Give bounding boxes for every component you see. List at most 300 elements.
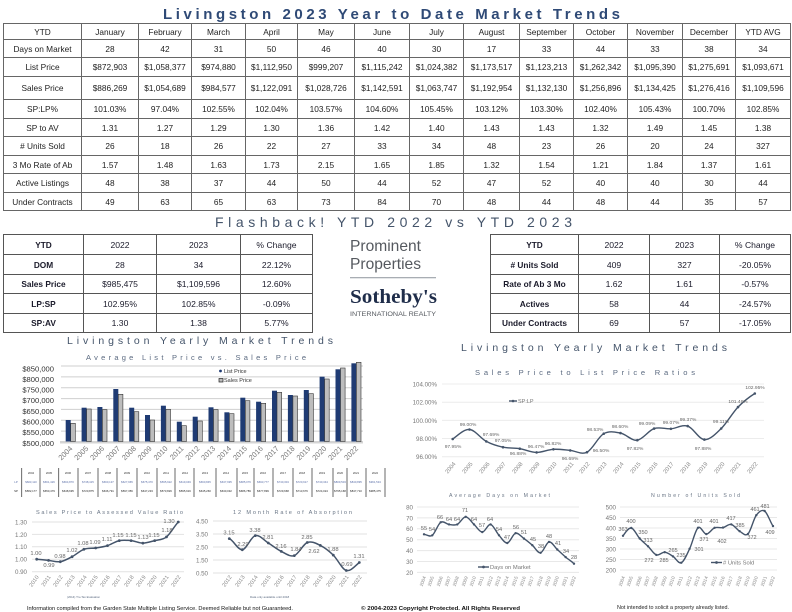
- row: list price: $1,024,382: [416, 62, 457, 72]
- x axis years: 2017: [112, 575, 124, 588]
- x axis years: 2021: [159, 575, 171, 588]
- y axis labels: $500,000: [22, 439, 54, 448]
- row: rate of absorption: [503, 279, 769, 289]
- y axis labels: [606, 504, 617, 574]
- y axis labels: [22, 364, 54, 448]
- table: yearly list and sales prices: 2008: [105, 471, 112, 475]
- trend line: [229, 535, 359, 571]
- row: days on market: 44: [596, 44, 605, 54]
- x axis years: 2019: [136, 575, 148, 588]
- y axis labels: 200: [606, 568, 617, 574]
- x axis years: 2010: [152, 444, 170, 462]
- row: under contracts: 57: [758, 196, 768, 206]
- row: rate of absorption: 1.48: [157, 160, 173, 170]
- x axis years: 2015: [261, 575, 273, 588]
- row: months header: November: [636, 26, 674, 36]
- row: list price: $999,207: [309, 62, 343, 72]
- row: DOM: 22.12%: [262, 260, 291, 270]
- row: rate of absorption: 1.32: [483, 160, 500, 170]
- row: active listings: 40: [650, 178, 660, 188]
- row: under contracts: 63: [160, 196, 170, 206]
- row: under contracts: 69: [609, 318, 619, 328]
- row: sale to list percent: 102.55%: [202, 104, 235, 114]
- table: yearly list and sales prices: $582,177: [25, 489, 37, 493]
- row: header: % Change: [735, 240, 775, 250]
- logo: Prominent Properties Sotheby's: [350, 238, 437, 318]
- data labels: 1.08: [77, 541, 89, 547]
- chart: number of units sold: [606, 493, 777, 587]
- x axis years: 2015: [231, 444, 249, 462]
- data labels: 417: [726, 516, 736, 522]
- table: yearly list and sales prices: $847,710: [350, 489, 362, 493]
- row: units sold: 26: [214, 141, 223, 151]
- x axis years: [419, 575, 577, 587]
- x axis years: 2021: [561, 575, 569, 587]
- x axis years: 2021: [730, 461, 743, 475]
- x axis years: 2020: [552, 575, 560, 587]
- x axis years: 2022: [171, 575, 183, 588]
- row: active listings: 44: [377, 178, 387, 188]
- row: LP:SP: -0.09%: [263, 298, 290, 308]
- row: active listings: 52: [542, 178, 551, 188]
- y axis labels: $750,000: [22, 386, 54, 394]
- y axis labels: 0.90: [15, 569, 28, 576]
- x axis years: 2017: [527, 575, 535, 587]
- caption: (2014) Tru-Tax Evaluation: [67, 595, 100, 599]
- table: yearly list and sales prices: 2014: [223, 471, 230, 475]
- x axis years: 2004: [419, 575, 427, 587]
- table: yearly list and sales prices: 2021: [353, 471, 360, 475]
- data labels: 481: [760, 504, 770, 510]
- x axis years: 2010: [29, 575, 41, 588]
- y axis labels: $800,000: [22, 375, 54, 384]
- row: months header: YTD AVG: [745, 26, 781, 36]
- y axis labels: 450: [606, 515, 617, 522]
- row: active listings: 37: [214, 178, 223, 188]
- table: yearly list and sales prices: 2009: [124, 471, 131, 475]
- x axis years: 2012: [53, 575, 65, 588]
- table: yearly list and sales prices: $648,695: [62, 489, 74, 493]
- x axis years: 2014: [613, 461, 626, 475]
- table: yearly list and sales prices: $677,899: [257, 489, 269, 493]
- y axis labels: [196, 518, 209, 578]
- data labels: 371: [699, 537, 709, 543]
- row: sales price: $1,063,747: [416, 83, 457, 93]
- row: rate of absorption: Rate of Ab 3 Mo: [503, 279, 566, 289]
- row: sale price to assessed value: 1.29: [210, 122, 227, 132]
- row: days on market: 30: [432, 44, 441, 54]
- row: sales price: $984,577: [201, 83, 236, 93]
- data labels: 1.02: [66, 548, 78, 554]
- table: yearly list and sales prices: $661,426: [43, 480, 55, 484]
- row: sales price: $1,134,425: [634, 83, 676, 93]
- row: under contracts: 44: [542, 196, 551, 206]
- chart: sales price to list price ratios: [413, 368, 765, 475]
- y axis labels: 70: [406, 516, 414, 522]
- row: days on market: 38: [704, 44, 714, 54]
- row: list price: $974,880: [201, 62, 236, 72]
- x axis years: 2017: [287, 575, 299, 588]
- data labels: 409: [765, 530, 775, 536]
- x axis years: 2013: [65, 575, 77, 588]
- x axis years: 2020: [751, 575, 759, 587]
- row: header: [502, 240, 775, 328]
- x axis years: 2016: [647, 461, 660, 475]
- row: months header: YTD: [34, 26, 51, 36]
- row: rate of absorption: 1.61: [676, 279, 693, 289]
- table: yearly list and sales prices: 2022: [372, 471, 379, 475]
- table: yearly list and sales prices: 2013: [202, 471, 209, 475]
- x axis years: 2007: [495, 461, 508, 475]
- data labels: 99.37%: [680, 417, 697, 423]
- x axis years: 2013: [596, 461, 609, 475]
- row: sale to list percent: 103.12%: [475, 104, 508, 114]
- x axis years: 2018: [124, 575, 136, 588]
- table: yearly list and sales prices: $573,826: [160, 489, 172, 493]
- x axis years: 2010: [469, 575, 477, 587]
- table: flashback left comparison: [3, 234, 313, 333]
- row: sales price: $1,132,130: [526, 83, 567, 93]
- table: yearly list and sales prices: $660,845: [199, 480, 211, 484]
- row: under contracts: 57: [680, 318, 689, 328]
- x axis years: 2020: [714, 461, 727, 475]
- row: units sold: 26: [105, 141, 115, 151]
- table: yearly list and sales prices: 2010: [144, 471, 151, 475]
- row: header: 2023: [675, 240, 694, 250]
- y axis labels: 20: [406, 570, 414, 577]
- data labels: 2.81: [262, 535, 274, 541]
- table: yearly list and sales prices: $603,110: [25, 480, 37, 484]
- x axis years: 2012: [486, 575, 494, 587]
- row: sale price to assessed value: 1.42: [374, 122, 390, 132]
- x axis years: 2010: [668, 575, 676, 587]
- row: days on market: 34: [758, 44, 768, 54]
- x axis years: 2022: [768, 575, 776, 587]
- row: rate of absorption: 1.37: [701, 160, 717, 170]
- x axis years: 2016: [718, 575, 726, 587]
- row: under contracts: 35: [704, 196, 714, 206]
- x axis years: 2022: [352, 575, 364, 588]
- legend: Days on Market: [490, 565, 531, 571]
- x axis years: 2020: [310, 444, 328, 462]
- data labels: 350: [638, 530, 648, 536]
- data labels: 2.85: [301, 535, 313, 541]
- row: sale to list percent: 100.70%: [693, 104, 725, 114]
- x axis years: 2005: [72, 444, 90, 462]
- row: months header: August: [479, 26, 504, 36]
- x axis years: 2006: [88, 444, 106, 462]
- data labels: 0.98: [54, 554, 66, 560]
- row: sales price: $1,276,416: [688, 83, 730, 93]
- row: sale price to assessed value: 1.45: [701, 122, 717, 132]
- row: rate of absorption: 1.63: [210, 160, 227, 170]
- data labels: 96.47%: [528, 444, 545, 450]
- table: yearly list and sales prices: $740,304: [277, 480, 289, 484]
- row: under contracts: Under Contracts: [12, 196, 73, 206]
- x axis years: 2021: [339, 575, 351, 588]
- logo: Prominent Properties Sotheby's: Properties: [350, 256, 421, 273]
- caption: Data only available until 2018: [250, 595, 290, 599]
- row: days on market: 50: [267, 44, 276, 54]
- row: under contracts: 49: [105, 196, 115, 206]
- data labels: 28: [571, 555, 577, 561]
- y axis labels: 60: [406, 526, 414, 533]
- y axis labels: $700,000: [22, 396, 54, 405]
- data labels: 64: [487, 517, 493, 523]
- row: sales price: Sales Price: [21, 279, 66, 289]
- row: sale to list percent: 104.60%: [366, 104, 398, 114]
- row: rate of absorption: 2.15: [318, 160, 334, 170]
- row: days on market: 33: [542, 44, 551, 54]
- y axis labels: 1.00: [15, 556, 28, 564]
- row: actives: 58: [609, 298, 619, 308]
- row: sales price: $1,109,596: [742, 83, 784, 93]
- row: rate of absorption: [13, 160, 771, 170]
- row: months header: July: [429, 26, 444, 36]
- table: yearly list and sales prices: 2019: [319, 471, 326, 475]
- table: yearly list and sales prices: 2005: [46, 471, 53, 475]
- row: months header: February: [148, 26, 182, 36]
- row: units sold: 26: [596, 141, 605, 151]
- y axis labels: 102.00%: [413, 400, 437, 406]
- row: units sold: # Units Sold: [511, 260, 558, 270]
- x axis years: 2018: [279, 444, 297, 462]
- table: yearly list and sales prices: $693,777: [257, 480, 269, 484]
- row: active listings: Active Listings: [16, 178, 69, 188]
- x axis years: 2013: [199, 444, 217, 462]
- table: yearly list and sales prices: $627,965: [121, 480, 133, 484]
- x axis years: 2017: [726, 575, 734, 587]
- row: sale price to assessed value: 1.49: [647, 122, 663, 132]
- data labels: 64: [446, 517, 452, 523]
- x axis years: 2016: [274, 575, 286, 588]
- data labels: 98.53%: [587, 427, 604, 433]
- trend line: [623, 510, 773, 563]
- row: months header: [12, 26, 784, 206]
- data labels: 402: [717, 539, 727, 545]
- x axis years: 2018: [536, 575, 544, 587]
- row: months header: June: [373, 26, 391, 36]
- row: SP:AV: 1.38: [190, 318, 207, 328]
- table: yearly list and sales prices: $647,233: [141, 489, 153, 493]
- footer: copyright: © 2004-2023 Copyright Protected. All Rights Reserved: [361, 605, 521, 612]
- y axis labels: 3.50: [196, 532, 209, 538]
- row: under contracts: 65: [214, 196, 223, 206]
- row: days on market: Days on Market: [13, 44, 72, 54]
- x axis years: 2011: [563, 461, 576, 475]
- x axis years: 2004: [618, 575, 626, 587]
- table: yearly list and sales prices: 2012: [182, 471, 189, 475]
- x axis years: 2013: [235, 575, 247, 588]
- row: header: 2023: [189, 240, 208, 250]
- data labels: 41: [555, 541, 561, 547]
- x axis years: 2017: [263, 444, 281, 462]
- row: sales price: $1,256,896: [580, 83, 621, 93]
- row: days on market: 40: [377, 44, 387, 54]
- row: sale to list percent: 102.85%: [747, 104, 779, 114]
- row: units sold: 33: [377, 141, 387, 151]
- x axis years: 2017: [663, 461, 676, 475]
- y axis labels: 1.50: [196, 558, 209, 564]
- row: sale to list percent: [27, 104, 780, 114]
- data labels: [445, 385, 765, 462]
- row: LP:SP: LP:SP: [31, 298, 56, 308]
- data labels: 265: [668, 548, 678, 554]
- data labels: 34: [563, 549, 569, 555]
- data labels: 97.82%: [627, 446, 644, 452]
- x axis years: 2009: [136, 444, 154, 462]
- row: units sold: [20, 141, 770, 151]
- heading: left yearly trends: Livingston Yearly Market Trends: [67, 335, 333, 347]
- row: sale price to assessed value: 1.38: [755, 122, 771, 132]
- row: rate of absorption: 1.21: [592, 160, 609, 170]
- data labels: 1.18: [161, 528, 173, 534]
- data labels: 54: [496, 527, 502, 533]
- row: days on market: 42: [160, 44, 170, 54]
- table: yearly list and sales prices: $660,137: [102, 480, 114, 484]
- x axis years: 2022: [569, 575, 577, 587]
- data labels: 54: [429, 527, 435, 533]
- row: sale price to assessed value: 1.27: [157, 122, 173, 132]
- logo: Prominent Properties Sotheby's: INTERNATIONAL REALTY: [350, 311, 437, 318]
- legend: SP:LP: [518, 399, 534, 405]
- x axis years: 2004: [445, 461, 458, 475]
- data labels: 97.88%: [695, 446, 712, 452]
- data labels: 55: [421, 526, 427, 532]
- row: sale to list percent: SP:LP%: [27, 104, 58, 114]
- row: list price: $1,262,342: [580, 62, 621, 72]
- data labels: 272: [644, 558, 654, 564]
- row: units sold: 34: [432, 141, 441, 151]
- row: months header: April: [263, 26, 280, 36]
- x axis years: 2012: [685, 575, 693, 587]
- x axis years: 2022: [342, 444, 360, 462]
- x axis years: 2005: [626, 575, 634, 587]
- row: units sold: 327: [677, 260, 692, 270]
- row: months header: September: [526, 26, 567, 36]
- table: yearly list and sales prices: SP: [14, 489, 18, 493]
- table: yearly list and sales prices: $595,916: [179, 489, 191, 493]
- data labels: 101.46%: [728, 399, 748, 405]
- row: SP:AV: [31, 318, 289, 328]
- table: monthly market metrics: [3, 23, 791, 211]
- data labels: 0.69: [341, 562, 353, 568]
- y axis labels: 50: [406, 537, 414, 544]
- table: yearly list and sales prices: 2018: [299, 471, 306, 475]
- data labels: 57: [479, 523, 485, 529]
- y axis labels: 80: [406, 504, 414, 512]
- data labels: 96.69%: [562, 456, 579, 462]
- row: SP:AV: 5.77%: [264, 318, 289, 328]
- row: active listings: [16, 178, 768, 188]
- table: yearly list and sales prices: $645,260: [199, 489, 211, 493]
- y axis labels: [406, 504, 414, 577]
- row: sale price to assessed value: 1.40: [428, 122, 445, 132]
- table: yearly list and sales prices: [14, 468, 385, 497]
- data labels: 1.88: [327, 547, 339, 553]
- row: LP:SP: 102.85%: [182, 298, 215, 308]
- row: sales price: [21, 279, 291, 289]
- x axis years: 2007: [104, 444, 122, 462]
- row: months header: March: [207, 26, 230, 36]
- row: units sold: 20: [650, 141, 660, 151]
- row: rate of absorption: -0.57%: [741, 279, 769, 289]
- chart title: Average Days on Market: [449, 493, 551, 499]
- chart: 12 month rate of absorption: [196, 510, 367, 599]
- table: yearly list and sales prices: 2015: [242, 471, 249, 475]
- y axis labels: 2.50: [196, 544, 209, 552]
- table: yearly list and sales prices: LP: [14, 480, 18, 484]
- table: yearly list and sales prices: 2011: [163, 471, 169, 475]
- table: yearly list and sales prices: $595,922: [160, 480, 172, 484]
- table: yearly list and sales prices: $795,168: [334, 489, 346, 493]
- data labels: 71: [462, 508, 468, 514]
- row: rate of absorption: 1.57: [102, 160, 118, 170]
- x axis years: 2014: [215, 444, 233, 462]
- legend: [509, 399, 534, 405]
- data labels: 97.95%: [445, 444, 462, 450]
- table: yearly list and sales prices: $809,503: [334, 480, 346, 484]
- row: days on market: 46: [321, 44, 331, 54]
- row: sales price: $985,475: [102, 279, 138, 289]
- row: under contracts: 63: [267, 196, 276, 206]
- row: sale to list percent: 105.43%: [639, 104, 671, 114]
- x axis years: 2018: [735, 575, 743, 587]
- row: rate of absorption: 1.54: [538, 160, 555, 170]
- table: yearly list and sales prices: 2017: [280, 471, 287, 475]
- data labels: 96.88%: [510, 451, 527, 457]
- x axis years: 2012: [222, 575, 234, 588]
- table: yearly list and sales prices: $619,049: [179, 480, 191, 484]
- data labels: 2.62: [308, 549, 320, 555]
- y axis labels: 400: [606, 526, 617, 532]
- row: sale to list percent: 97.04%: [151, 104, 179, 114]
- row: list price: List Price: [25, 62, 60, 72]
- data labels: 0.99: [43, 563, 55, 569]
- row: DOM: [34, 260, 291, 270]
- x axis years: 2008: [120, 444, 138, 462]
- y axis labels: 104.00%: [413, 382, 437, 388]
- row: days on market: 17: [487, 44, 496, 54]
- logo: Prominent Properties Sotheby's: Prominent: [350, 238, 422, 255]
- chart title: 12 Month Rate of Absorption: [233, 510, 352, 516]
- row: list price: $1,095,390: [634, 62, 676, 72]
- logo: Prominent Properties Sotheby's: Sotheby's: [350, 286, 437, 308]
- row: days on market: 31: [214, 44, 223, 54]
- x axis years: 2014: [248, 575, 260, 588]
- x axis years: 2004: [56, 444, 74, 462]
- table: yearly list and sales prices: $637,995: [220, 480, 232, 484]
- row: under contracts: 73: [321, 196, 331, 206]
- legend: # Units Sold: [723, 560, 754, 566]
- data labels: 98.60%: [612, 424, 629, 430]
- x axis years: [222, 575, 364, 588]
- footer: disclaimer: Not intended to solicit a property already listed.: [617, 605, 729, 611]
- chart title: Sales Price to Assessed Value Ratio: [36, 510, 183, 516]
- trend line: [37, 522, 178, 562]
- row: sale price to assessed value: 1.36: [318, 122, 334, 132]
- x axis years: [618, 575, 776, 587]
- y axis labels: 40: [406, 548, 414, 555]
- x axis years: 2009: [529, 461, 542, 475]
- data labels: 64: [454, 517, 460, 523]
- row: units sold: 23: [542, 141, 551, 151]
- row: sale to list percent: 102.04%: [255, 104, 288, 114]
- row: rate of absorption: 1.65: [374, 160, 390, 170]
- data labels: 235: [676, 553, 686, 559]
- row: header: 2022: [604, 240, 624, 250]
- y axis labels: 30: [406, 559, 414, 566]
